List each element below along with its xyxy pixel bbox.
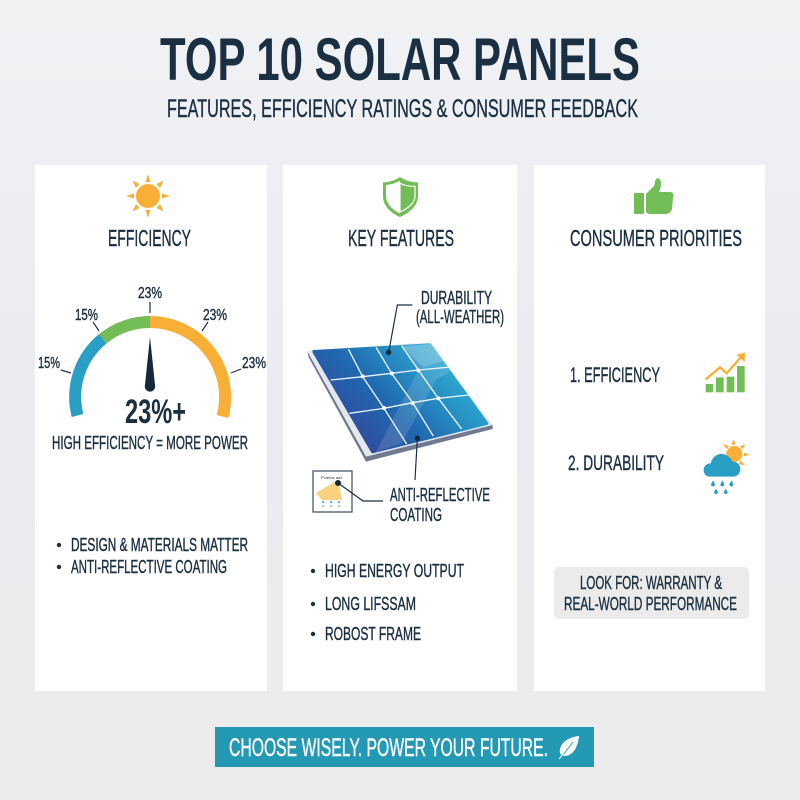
efficiency bullet list [57,535,248,577]
callout: look for [554,567,749,619]
efficiency bullet list: DESIGN & MATERIALS MATTER [71,535,248,555]
features bullet list: LONG LIFSSAM [325,594,416,614]
gauge chart: 15% [38,355,60,372]
priority 2: durability: 2. DURABILITY [568,452,664,475]
glare on panel [376,344,457,452]
gauge value: 23%+ [125,393,186,431]
icon: growth chart [706,353,745,392]
callout: durability [416,287,504,327]
priority 1: efficiency: 1. EFFICIENCY [570,364,660,387]
gauge needle [145,337,155,392]
gauge chart: 15% [75,307,98,324]
solar panel illustration [307,305,493,480]
gauge caption: HIGH EFFICIENCY = MORE POWER [52,433,248,453]
callout: durability: DURABILITY [421,287,492,308]
banner [215,727,594,767]
features bullet list [311,561,464,644]
gauge chart: 23% [203,307,227,324]
heading: key features: KEY FEATURES [348,225,454,251]
callout: look for: LOOK FOR: WARRANTY & [580,573,722,593]
features bullet list: ROBOST FRAME [325,624,421,644]
gauge chart: 23% [138,285,162,302]
gauge chart [38,285,266,431]
icon: sun [126,174,170,218]
inset: coating diagram: Poetra ael [321,475,342,480]
callout: anti-reflective coating: COATING [390,504,442,525]
inset: coating diagram [313,471,383,512]
efficiency bullet list: ANTI-REFLECTIVE COATING [71,557,227,577]
panel: consumer priorities [534,165,765,691]
callout: anti-reflective coating: ANTI-REFLECTIVE [390,484,490,505]
icon: thumbs up [634,178,673,214]
callout: anti-reflective coating [390,484,490,525]
heading: efficiency: EFFICIENCY [108,225,191,251]
callout: durability: (ALL-WEATHER) [416,306,504,327]
panel: efficiency [35,165,267,691]
icon: shield [383,177,418,217]
banner: CHOOSE WISELY. POWER YOUR FUTURE. [229,734,548,762]
gauge chart: 23% [242,355,266,372]
icon: leaf [559,736,579,759]
leader line: anti-reflective [415,438,417,480]
features bullet list: HIGH ENERGY OUTPUT [325,561,464,581]
panel: key features [283,165,517,691]
leader line: durability [389,305,412,352]
icon: weather [704,439,749,494]
